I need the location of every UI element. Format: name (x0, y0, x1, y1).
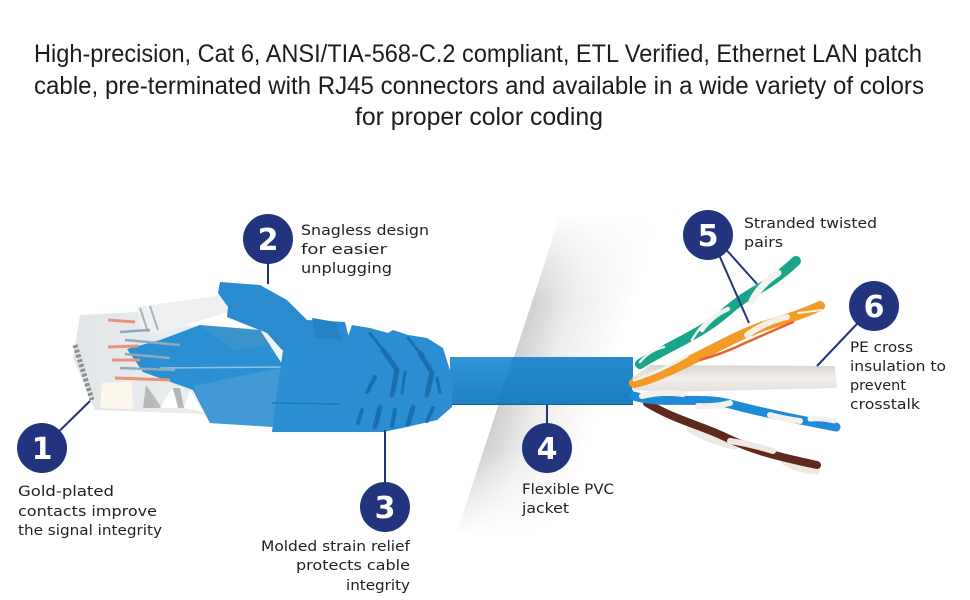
callout 3: integrity (346, 578, 410, 594)
callout 1 (17, 423, 162, 539)
blue twisted pair (634, 393, 836, 427)
blue plug body (127, 325, 284, 427)
callout 3: 3 (375, 491, 395, 526)
callout 6: insulation to (850, 359, 946, 375)
PE cross insulator (632, 365, 837, 392)
contacts (108, 320, 170, 380)
snagless latch (218, 282, 352, 350)
title (34, 40, 924, 131)
title: cable, pre-terminated with RJ45 connectors and available in a wide variety of colors (34, 72, 924, 100)
callout 6: crosstalk (850, 397, 921, 413)
orange twisted pair (634, 306, 822, 383)
callout 1: contacts improve (18, 504, 157, 520)
callout 1: Gold-plated (18, 484, 114, 500)
callout 2: Snagless design (301, 223, 429, 239)
callout 2: unplugging (301, 261, 392, 277)
exposed wire pairs (632, 261, 837, 471)
callout 6 (849, 281, 946, 413)
callout 3: protects cable (296, 558, 410, 574)
callout 6: prevent (850, 378, 906, 394)
brown twisted pair (647, 403, 817, 471)
transparent plug head (73, 295, 300, 427)
callout 2 (243, 214, 429, 277)
strain relief boot (272, 325, 453, 432)
green twisted pair (640, 261, 796, 364)
cable jacket (450, 357, 633, 404)
callout 6: 6 (864, 290, 884, 325)
clear bottom teeth (100, 381, 133, 409)
callout 2: 2 (258, 223, 278, 258)
callout 5 (683, 210, 877, 260)
callout 3: Molded strain relief (261, 539, 411, 555)
callout 4 (521, 423, 614, 517)
callout 1: the signal integrity (18, 523, 162, 539)
callout 5: Stranded twisted (744, 216, 877, 232)
callout 3 (261, 482, 411, 594)
callout 6: PE cross (850, 340, 913, 356)
callout leader lines (42, 239, 874, 507)
title: High-precision, Cat 6, ANSI/TIA-568-C.2 compliant, ETL Verified, Ethernet LAN patch (34, 40, 922, 68)
callout 1: 1 (32, 432, 52, 467)
callout 2: for easier (301, 242, 387, 258)
callout 5: pairs (744, 235, 783, 251)
callout 4: 4 (537, 432, 557, 467)
title: for proper color coding (355, 103, 603, 131)
RJ45 connector (73, 282, 453, 432)
callout 5: 5 (698, 219, 718, 254)
callout 4: Flexible PVC (522, 482, 614, 498)
callout 4: jacket (521, 501, 569, 517)
diagonal shadow backdrop (440, 214, 670, 534)
